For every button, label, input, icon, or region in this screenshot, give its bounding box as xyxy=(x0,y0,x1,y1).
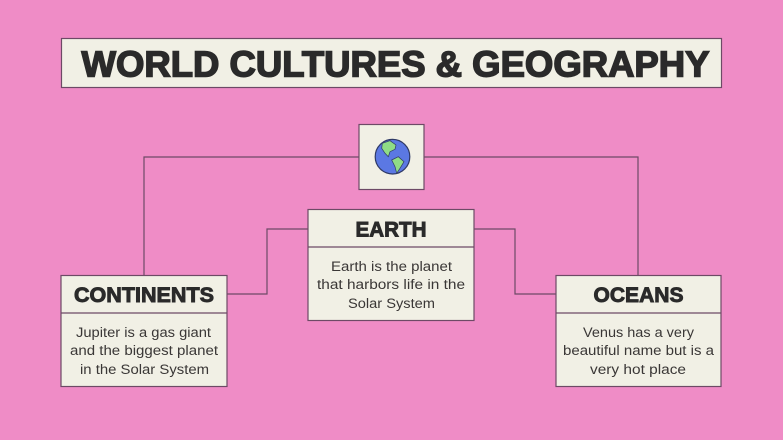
text: oceans description: very hot place xyxy=(590,362,686,378)
text: earth description: Earth is the planet xyxy=(331,259,452,275)
text: continents description: and the biggest planet xyxy=(70,343,218,359)
connector: globe to oceans xyxy=(424,157,638,275)
heading: continents: CONTINENTS xyxy=(74,284,214,307)
text: earth description xyxy=(317,259,465,312)
text: earth description: Solar System xyxy=(348,296,435,312)
connector: globe to continents xyxy=(144,157,359,275)
text: continents description: in the Solar System xyxy=(80,362,209,378)
text: continents description: Jupiter is a gas giant xyxy=(76,325,211,341)
title: WORLD CULTURES & GEOGRAPHY xyxy=(82,43,710,84)
connector: continents to earth xyxy=(227,229,308,294)
panel: earth xyxy=(308,210,474,320)
connector: earth to oceans xyxy=(474,229,556,294)
panel: oceans xyxy=(556,276,721,386)
text: continents description xyxy=(70,325,218,378)
panel: continents xyxy=(61,276,227,386)
text: oceans description xyxy=(563,325,714,378)
heading: earth: EARTH xyxy=(356,218,426,242)
icon: globe xyxy=(359,124,424,190)
text: earth description: that harbors life in the xyxy=(317,277,465,293)
text: oceans description: Venus has a very xyxy=(583,325,695,341)
text: oceans description: beautiful name but is a xyxy=(563,343,714,359)
heading: oceans: OCEANS xyxy=(594,284,684,307)
